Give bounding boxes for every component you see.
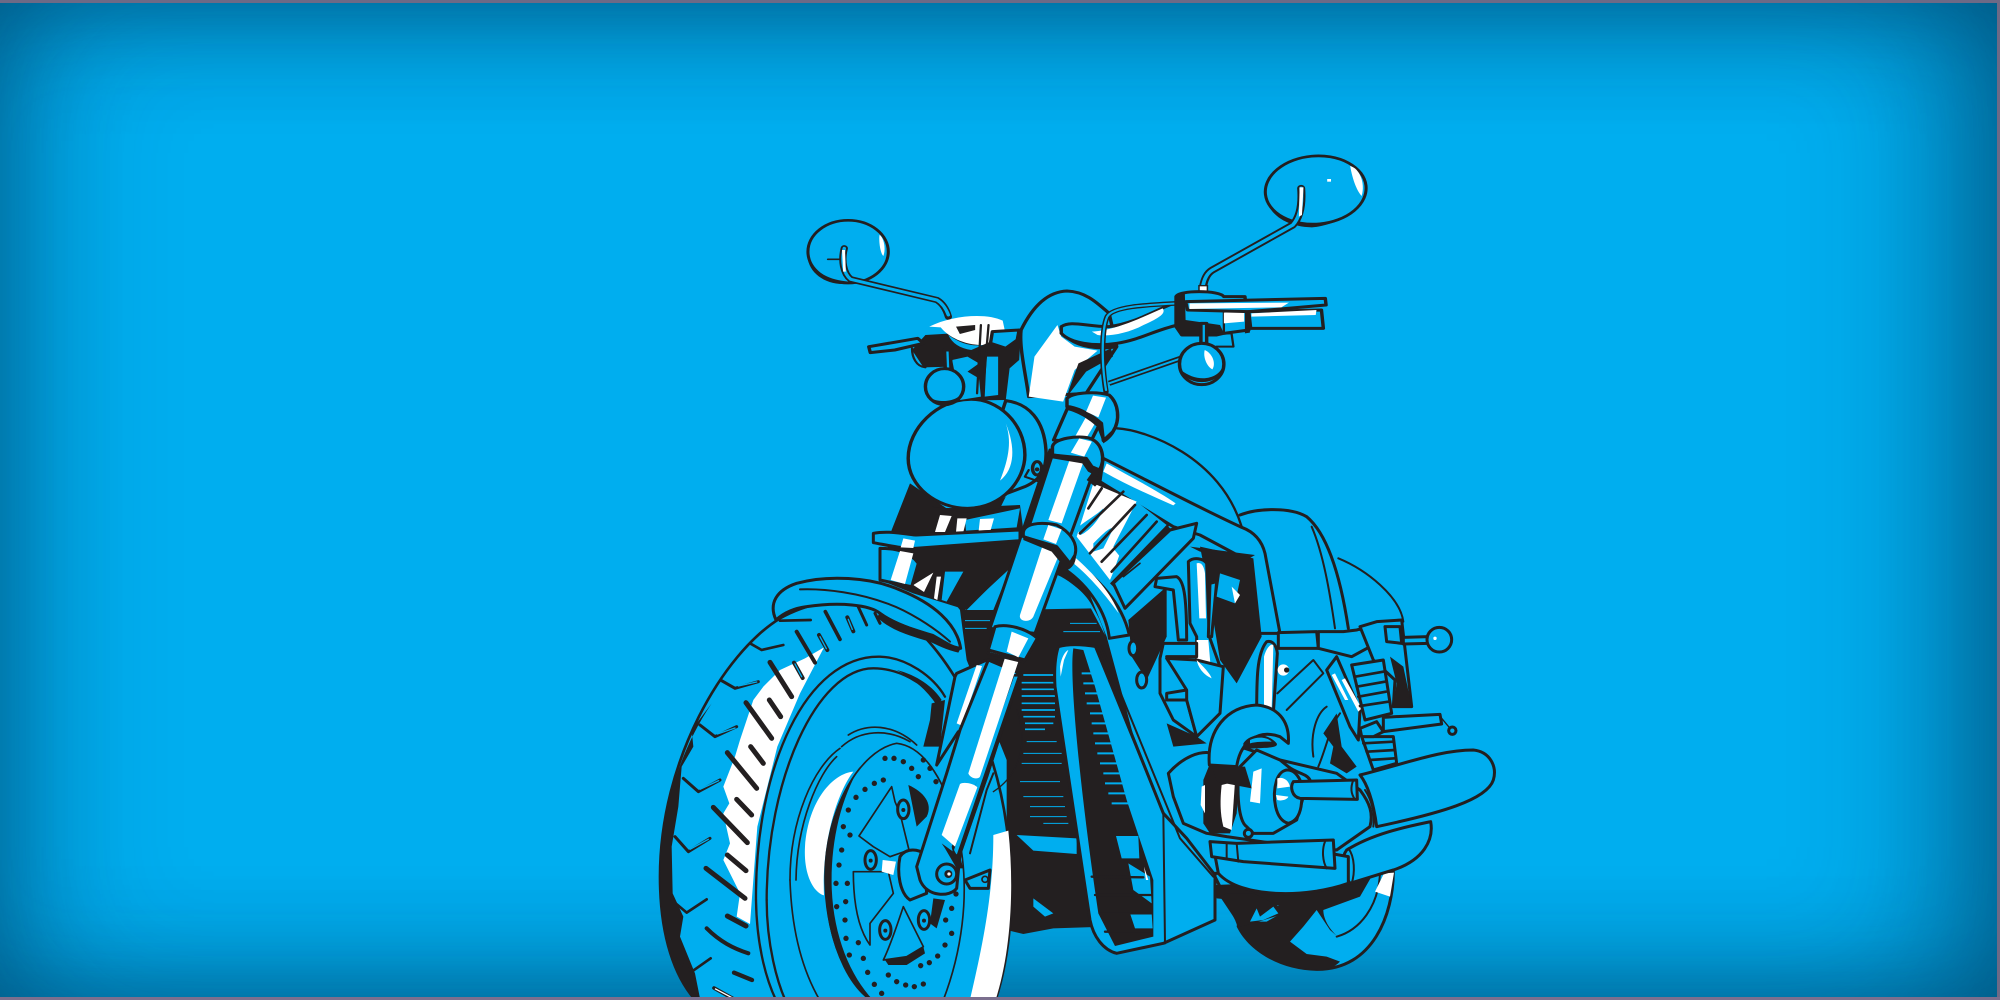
white bars under headlight bbox=[965, 508, 1020, 531]
left riser block bbox=[912, 330, 1021, 401]
carburettor bbox=[1160, 643, 1197, 737]
frame arc tube bbox=[1065, 559, 1129, 638]
right bar bbox=[1061, 302, 1178, 345]
engine case and exhaust headers bbox=[1168, 705, 1371, 927]
right frame and tank tube bbox=[1065, 428, 1280, 638]
cylinder tube bbox=[1155, 577, 1187, 640]
top fork tube bbox=[1054, 405, 1103, 443]
belt guard and drive belt bbox=[1055, 645, 1215, 953]
hub bolts bbox=[865, 800, 930, 939]
clutch cover bbox=[1274, 770, 1302, 823]
footpeg bbox=[1383, 714, 1442, 732]
axle bbox=[937, 864, 957, 884]
tyre shadow crescent bbox=[660, 703, 712, 1000]
handlebar and controls bbox=[869, 291, 1326, 477]
rear shock and linkage bbox=[1312, 620, 1456, 773]
radiator grille bbox=[1077, 483, 1137, 580]
left fork tube and crossbar bbox=[873, 530, 1020, 587]
rear peg knob bbox=[1403, 637, 1428, 644]
grip bbox=[1249, 310, 1323, 328]
lever bbox=[1186, 298, 1326, 312]
brake cable bbox=[1103, 303, 1178, 392]
footrest bar bbox=[1210, 840, 1335, 868]
black area behind headlight bbox=[880, 483, 1093, 610]
switch housing bbox=[1176, 292, 1249, 335]
disc perforations bbox=[833, 756, 959, 996]
lower clamp bbox=[1023, 523, 1076, 563]
front tyre bbox=[660, 599, 1011, 1000]
right ball bbox=[1201, 323, 1207, 343]
blue panel under frame arc bbox=[1037, 575, 1093, 609]
headlight bbox=[908, 399, 1046, 513]
front fork upper tube and clamps bbox=[988, 440, 1102, 660]
black engine bay mass bbox=[920, 540, 1140, 934]
lower cable bbox=[1109, 358, 1182, 383]
elbow pipe bbox=[1209, 705, 1288, 767]
rear wheel bbox=[1213, 872, 1394, 969]
collar at fork base bbox=[988, 626, 1037, 660]
rotor vanes bbox=[908, 785, 929, 827]
radiator fins bbox=[965, 621, 1100, 823]
left mirror bbox=[808, 220, 948, 317]
right mirror bbox=[1199, 152, 1370, 291]
wheel rim bbox=[756, 657, 945, 1000]
left lever bbox=[869, 338, 923, 353]
left ball bbox=[945, 350, 951, 370]
rear shock spring bbox=[1352, 660, 1392, 720]
white sidewall highlight bbox=[723, 647, 824, 924]
seat and rear fender bbox=[1240, 510, 1403, 628]
front fender bbox=[773, 578, 961, 653]
fairing centre bbox=[1021, 291, 1117, 397]
exhaust mufflers bbox=[1343, 750, 1494, 883]
engine bbox=[1128, 547, 1323, 747]
bolts bbox=[1129, 641, 1138, 656]
frame vertical bbox=[1257, 641, 1277, 713]
belly pan bbox=[1220, 893, 1280, 927]
front fork lower leg bbox=[917, 627, 1037, 894]
brake disc bbox=[825, 743, 964, 1000]
tread bars bbox=[672, 603, 880, 1000]
